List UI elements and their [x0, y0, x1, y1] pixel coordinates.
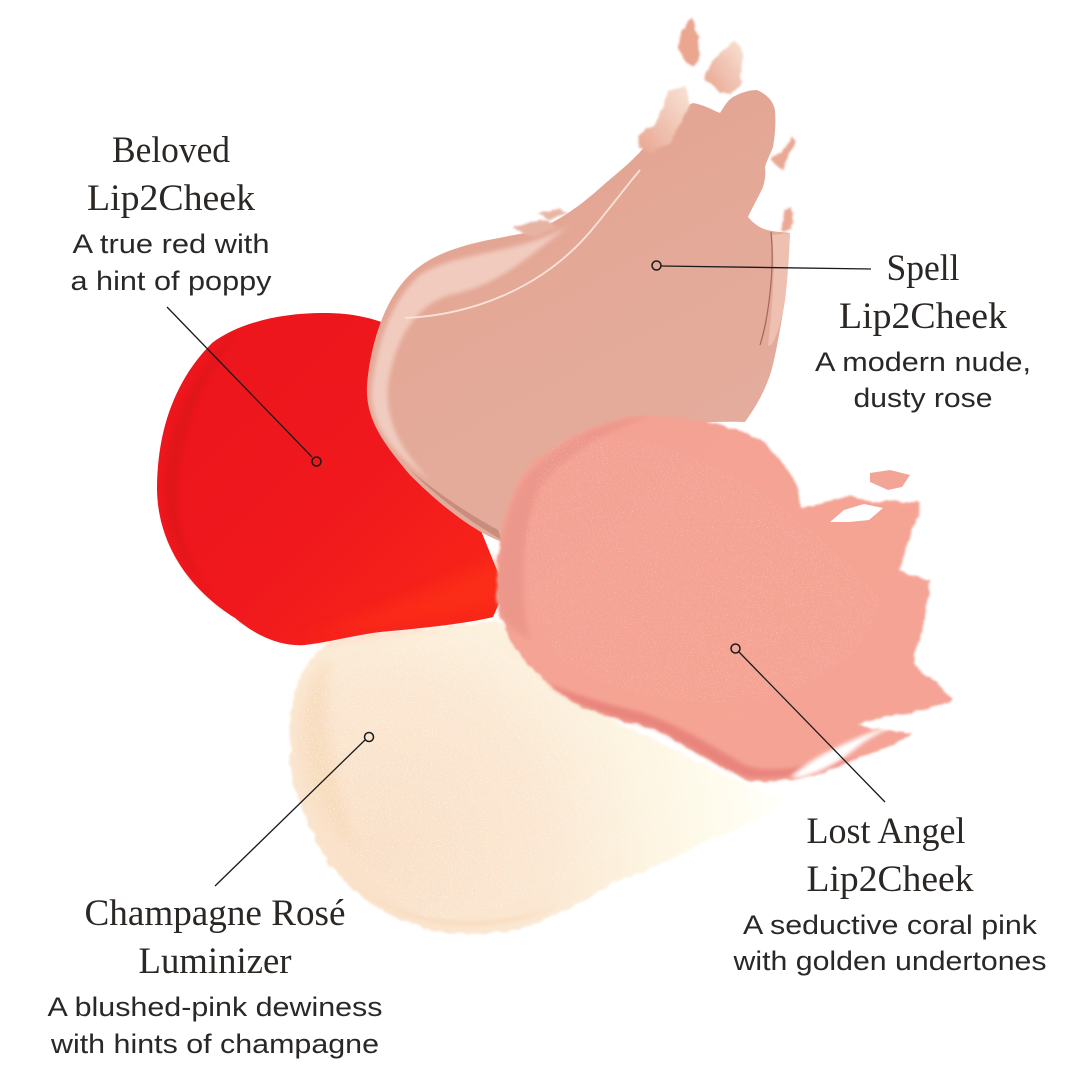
swatch: nude Spell	[367, 90, 790, 542]
decor: nude flecks at the top of the smear	[512, 17, 796, 237]
callout line: Champagne Rosé	[215, 732, 374, 886]
callout line: Spell	[652, 261, 871, 270]
label: Champagne Rosé Luminizer: A blushed-pink dewiness	[48, 992, 382, 1022]
label: Spell Lip2Cheek: Lip2Cheek	[839, 296, 1008, 337]
swatch: red Beloved	[157, 313, 505, 645]
swatch: champagne luminizer	[290, 620, 785, 934]
label: Spell Lip2Cheek: Spell	[886, 248, 960, 289]
label: Lost Angel Lip2Cheek	[732, 811, 1046, 976]
callout line: Beloved	[167, 307, 321, 466]
label: Lost Angel Lip2Cheek: with golden undertones	[732, 946, 1046, 976]
label: Spell Lip2Cheek: A modern nude,	[815, 347, 1031, 377]
label: Champagne Rosé Luminizer: Champagne Rosé	[84, 893, 346, 934]
label: Champagne Rosé Luminizer: with hints of champagne	[50, 1029, 379, 1059]
label: Champagne Rosé Luminizer	[48, 893, 382, 1059]
label: Beloved Lip2Cheek	[70, 130, 272, 296]
label: Spell Lip2Cheek	[815, 248, 1031, 413]
callout line: Lost Angel	[731, 644, 885, 802]
label: Lost Angel Lip2Cheek: Lost Angel	[806, 811, 966, 852]
label: Spell Lip2Cheek: dusty rose	[854, 383, 992, 413]
label: Beloved Lip2Cheek: A true red with	[72, 229, 270, 259]
label: Lost Angel Lip2Cheek: A seductive coral pink	[743, 910, 1038, 940]
label: Lost Angel Lip2Cheek: Lip2Cheek	[806, 859, 974, 900]
label: Beloved Lip2Cheek: Lip2Cheek	[87, 178, 256, 219]
label: Beloved Lip2Cheek: Beloved	[112, 130, 230, 171]
label: Champagne Rosé Luminizer: Luminizer	[138, 941, 292, 982]
swatch: coral Lost Angel	[497, 416, 952, 782]
label: Beloved Lip2Cheek: a hint of poppy	[70, 266, 272, 296]
